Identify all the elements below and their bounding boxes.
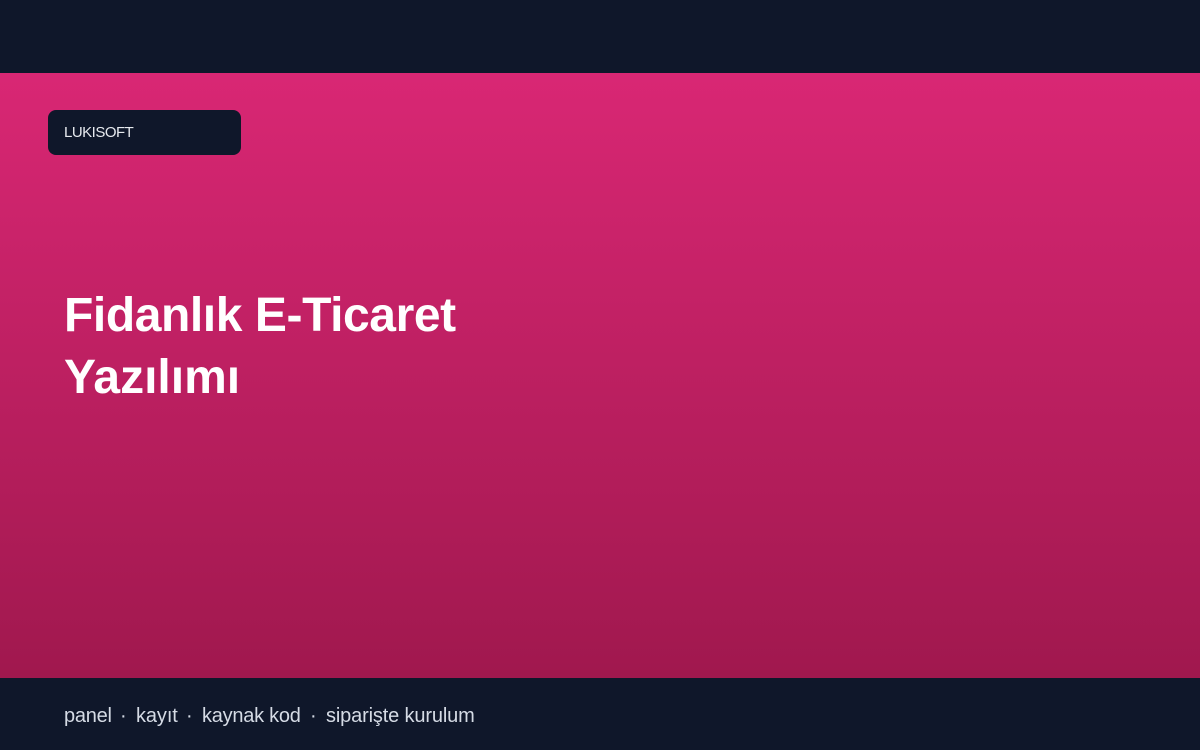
feature list (64, 705, 475, 727)
feature list: kayıt (136, 705, 178, 727)
footer band (0, 678, 1200, 750)
feature list: panel (64, 705, 112, 727)
title (64, 289, 456, 404)
feature list: · (310, 705, 316, 727)
feature list: · (186, 705, 192, 727)
title: Yazılımı (64, 351, 240, 404)
feature list: · (120, 705, 126, 727)
feature list: kaynak kod (202, 705, 301, 727)
feature list: siparişte kurulum (326, 705, 475, 727)
brand badge: LUKISOFT (64, 124, 133, 141)
brand badge (48, 110, 241, 155)
title: Fidanlık E-Ticaret (64, 289, 456, 342)
top band (0, 0, 1200, 73)
